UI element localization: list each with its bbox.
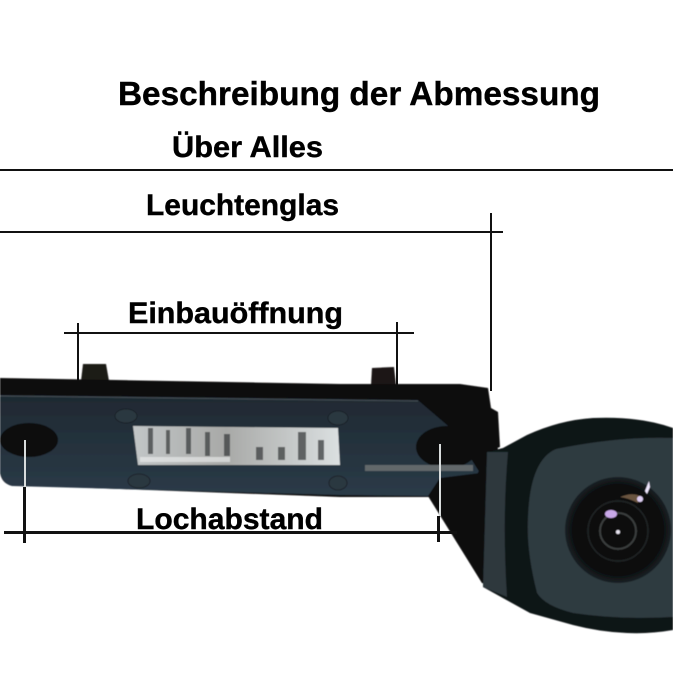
dimension: mounting opening: Einbauöffnung xyxy=(128,297,343,330)
plate face xyxy=(0,395,487,496)
plate body xyxy=(0,378,500,583)
plate top highlight xyxy=(0,396,418,401)
right screw hole xyxy=(416,426,478,468)
camera lens xyxy=(565,477,671,583)
bracket strip xyxy=(483,452,508,597)
slot xyxy=(365,465,473,471)
camera housing xyxy=(483,418,673,633)
left screw hole xyxy=(0,423,58,457)
title: Beschreibung der Abmessung xyxy=(118,75,600,112)
dimension: lens glass width: Leuchtenglas xyxy=(146,189,339,222)
dimension: overall width: Über Alles xyxy=(172,131,323,164)
dimension: hole spacing xyxy=(4,440,457,543)
mounting clips xyxy=(81,364,396,385)
camera face xyxy=(528,438,673,618)
lamp glass xyxy=(133,426,340,465)
camera and licence plate light photo xyxy=(0,364,673,633)
dark corner of bracket xyxy=(418,400,498,585)
plate rivets xyxy=(115,409,348,490)
dimension: hole spacing: Lochabstand xyxy=(136,503,323,536)
